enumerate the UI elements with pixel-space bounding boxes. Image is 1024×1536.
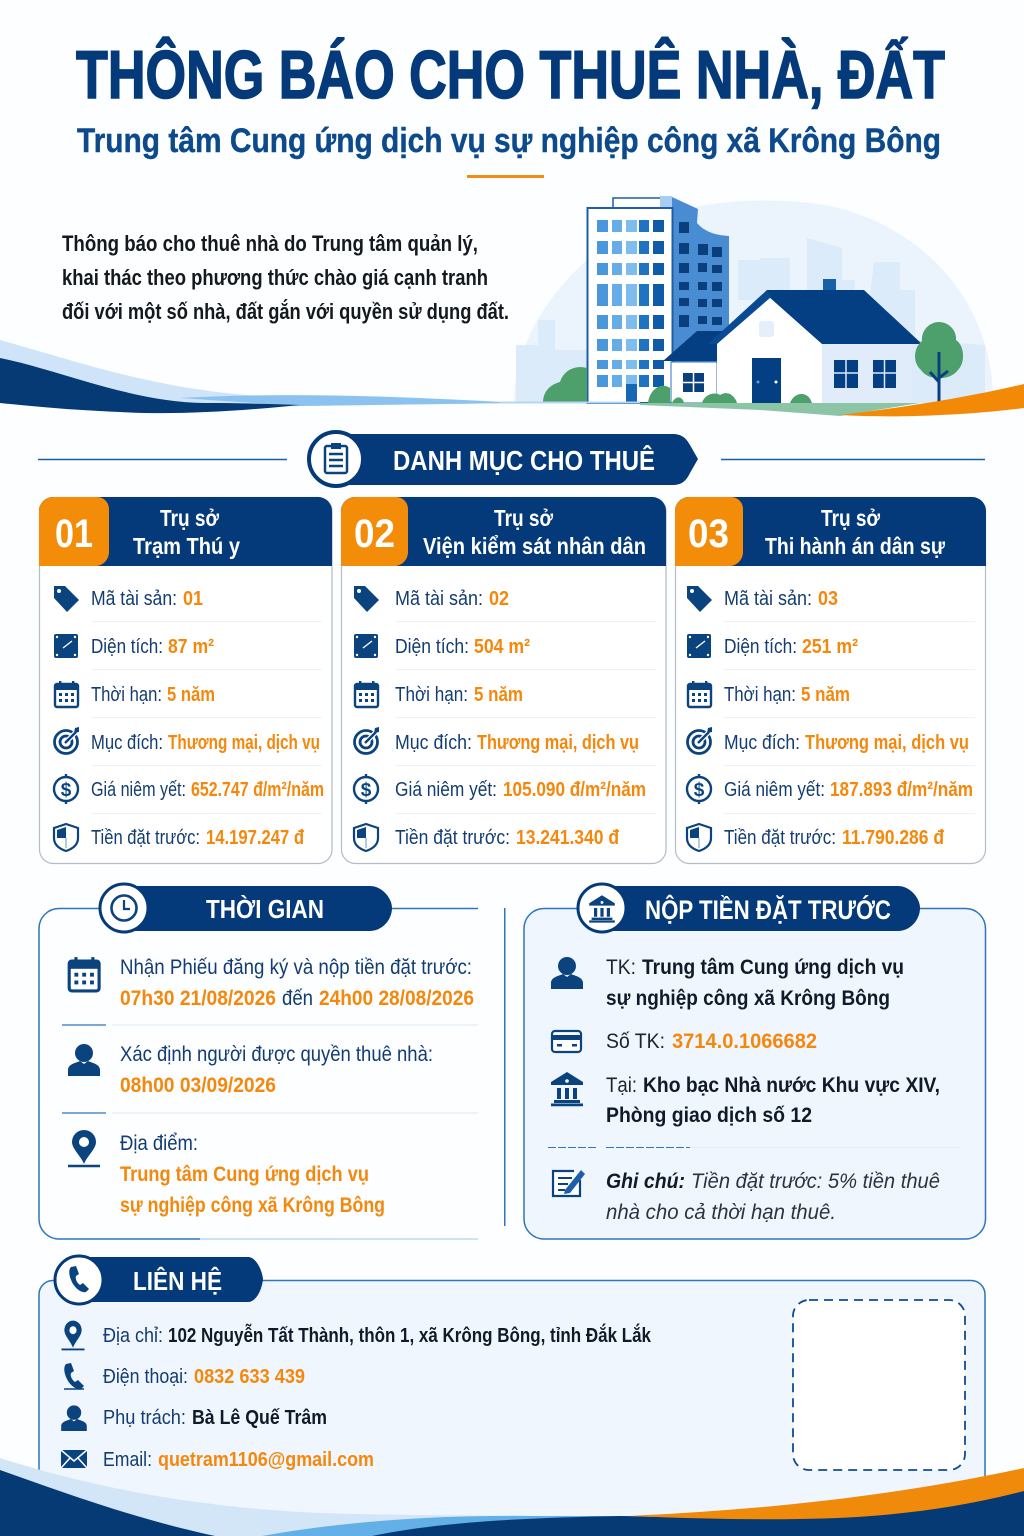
panel: thời gian: 08h00 03/09/2026 (120, 1073, 276, 1097)
heading pill: nộp tiền (578, 884, 920, 932)
panel: card 02: Mã tài sản: (395, 588, 483, 610)
icon: card (552, 1031, 581, 1052)
panel: card 01: Thời hạn: (91, 684, 162, 706)
panel: card 02: Viện kiểm sát nhân dân (423, 533, 646, 559)
panel: card 02: Mục đích: (395, 732, 472, 754)
panel: card 03: Tiền đặt trước: (724, 827, 836, 849)
panel: card 03: Thương mại, dịch vụ (805, 732, 969, 754)
panel: card 03: Diện tích: (724, 636, 797, 658)
panel: nộp tiền đặt trước: Số TK: (606, 1029, 665, 1053)
panel: nộp tiền đặt trước: Trung tâm Cung ứng dịch vụ (642, 955, 904, 979)
panel: card 03 (675, 497, 986, 864)
icon: phone (64, 1363, 84, 1389)
section heading: Danh mục cho thuê (38, 432, 985, 486)
panel: liên hệ: Bà Lê Quế Trâm (192, 1407, 327, 1429)
panel: thời gian (39, 884, 478, 1239)
panel: card 01: 01 (183, 588, 203, 610)
panel: card 03: 5 năm (801, 684, 850, 706)
panel: liên hệ (39, 1256, 985, 1536)
panel: liên hệ: Điện thoại: (103, 1366, 188, 1388)
panel: thời gian: Trung tâm Cung ứng dịch vụ (120, 1162, 369, 1186)
section heading: Danh mục cho thuê: DANH MỤC CHO THUÊ (393, 445, 655, 476)
intro text: Thông báo cho thuê nhà do Trung tâm quản lý, (62, 231, 478, 256)
bushes (543, 367, 812, 403)
panel: nộp tiền đặt trước: TK: (606, 955, 636, 979)
heading pill: liên hệ: LIÊN HỆ (133, 1266, 222, 1296)
tall building (588, 196, 729, 403)
panel: card 02: 13.241.340 đ (516, 827, 620, 849)
small wing (663, 331, 725, 403)
panel: liên hệ: Email: (103, 1449, 152, 1471)
panel: nộp tiền đặt trước: Tại: (606, 1073, 637, 1097)
panel: thời gian: 07h30 21/08/2026 (120, 986, 276, 1010)
panel: nộp tiền đặt trước: nhà cho cả thời hạn thuê. (606, 1200, 836, 1224)
panel: card 03: 251 m² (802, 636, 858, 658)
panel: card 02: 02 (489, 588, 509, 610)
icon: person (61, 1405, 87, 1431)
illustration: buildings and house (500, 196, 993, 416)
panel: liên hệ: Phụ trách: (103, 1407, 186, 1429)
ground (640, 403, 920, 416)
panel: thời gian: sự nghiệp công xã Krông Bông (120, 1193, 385, 1217)
panel: card 03: 187.893 đ/m²/năm (830, 779, 973, 801)
intro text: đối với một số nhà, đất gắn với quyền sử dụng đất. (62, 299, 509, 324)
panel: card 01: Mục đích: (91, 732, 163, 754)
heading pill: nộp tiền: NỘP TIỀN ĐẶT TRƯỚC (645, 894, 891, 925)
panel: nộp tiền đặt trước: 3714.0.1066682 (672, 1029, 817, 1053)
panel: nộp tiền đặt trước: Phòng giao dịch số 12 (606, 1103, 812, 1127)
icon: calendar (69, 957, 99, 991)
intro text (62, 231, 509, 324)
panel: card 03: 03 (818, 588, 838, 610)
icon: clipboard (325, 443, 347, 473)
panel: card 03: Mã tài sản: (724, 588, 812, 610)
tree (915, 322, 963, 404)
panel: card 01: 5 năm (167, 684, 215, 706)
panel: card 02: Tiền đặt trước: (395, 827, 510, 849)
panel: nộp tiền đặt trước (524, 884, 986, 1239)
panel: thời gian: đến (282, 986, 313, 1010)
heading pill: thời gian: THỜI GIAN (206, 894, 324, 924)
heading pill: liên hệ (55, 1256, 263, 1304)
panel: liên hệ: 0832 633 439 (194, 1366, 305, 1388)
panel: thời gian: Nhận Phiếu đăng ký và nộp tiền đặt trước: (120, 955, 472, 979)
panel: card 03: 11.790.286 đ (842, 827, 945, 849)
panel: card 01: Trụ sở (160, 505, 220, 531)
panel: card 01: Trạm Thú y (133, 533, 240, 559)
panel: liên hệ: 102 Nguyễn Tất Thành, thôn 1, xã Krông Bông, tỉnh Đắk Lắk (168, 1323, 652, 1347)
panel: card 01: 87 m² (168, 636, 214, 658)
panel: nộp tiền đặt trước: sự nghiệp công xã Krông Bông (606, 986, 890, 1010)
orange wave right (840, 384, 1024, 416)
icon: bank in heading (589, 895, 615, 923)
panel: card 01: 01 (55, 512, 93, 556)
panel: card 01: 652.747 đ/m²/năm (191, 779, 324, 801)
panel: card 01 (39, 497, 332, 864)
panel: thời gian: Xác định người được quyền thuê nhà: (120, 1042, 433, 1066)
panel: liên hệ: Địa chỉ: (103, 1325, 163, 1347)
panel: card 01: Diện tích: (91, 636, 163, 658)
panel: card 03: Thi hành án dân sự (765, 533, 945, 559)
panel: card 02: 02 (354, 512, 395, 556)
panel: card 02: Thời hạn: (395, 684, 468, 706)
panel: card 01: Mã tài sản: (91, 588, 177, 610)
vertical divider line (504, 908, 506, 1226)
house (708, 279, 922, 409)
panel: card 02: Diện tích: (395, 636, 469, 658)
panel: thời gian: Địa điểm: (120, 1131, 198, 1155)
icon: note (553, 1170, 585, 1196)
panel: nộp tiền đặt trước: Tiền đặt trước: 5% tiền thuê (691, 1169, 940, 1193)
panel: card 03: Trụ sở (821, 505, 881, 531)
panel: card 01: Thương mại, dịch vụ (168, 732, 320, 754)
title accent line (467, 175, 544, 178)
panel: liên hệ: quetram1106@gmail.com (158, 1449, 374, 1471)
panel: card 01: 14.197.247 đ (206, 827, 305, 849)
panel: thời gian: 24h00 28/08/2026 (319, 986, 474, 1010)
panel: nộp tiền đặt trước: Ghi chú: (606, 1169, 685, 1193)
panel: card 03: Thời hạn: (724, 684, 796, 706)
panel: card 02: 504 m² (474, 636, 530, 658)
panel: card 02 (341, 497, 666, 864)
panel: card 03: Giá niêm yết: (724, 779, 825, 801)
panel: card 03: Mục đích: (724, 732, 800, 754)
panel: card 02: Thương mại, dịch vụ (477, 732, 639, 754)
icon: address pin (61, 1321, 85, 1349)
QR placeholder (793, 1300, 965, 1470)
panel: card 01: Giá niêm yết: (91, 779, 186, 801)
panel: card 03: 03 (688, 512, 729, 556)
panel: card 02: 105.090 đ/m²/năm (503, 779, 646, 801)
panel: card 02: Giá niêm yết: (395, 779, 497, 801)
panel: card 02: 5 năm (474, 684, 523, 706)
heading pill: thời gian (100, 884, 392, 932)
icon: mail (61, 1450, 87, 1468)
panel: card 01: Tiền đặt trước: (91, 827, 200, 849)
intro text: khai thác theo phương thức chào giá cạnh tranh (62, 265, 488, 290)
panel: nộp tiền đặt trước: Kho bạc Nhà nước Khu vực XIV, (643, 1073, 940, 1097)
top wave decoration (0, 340, 520, 413)
panel: card 02: Trụ sở (494, 505, 554, 531)
bottom wave decoration (0, 1458, 1024, 1536)
